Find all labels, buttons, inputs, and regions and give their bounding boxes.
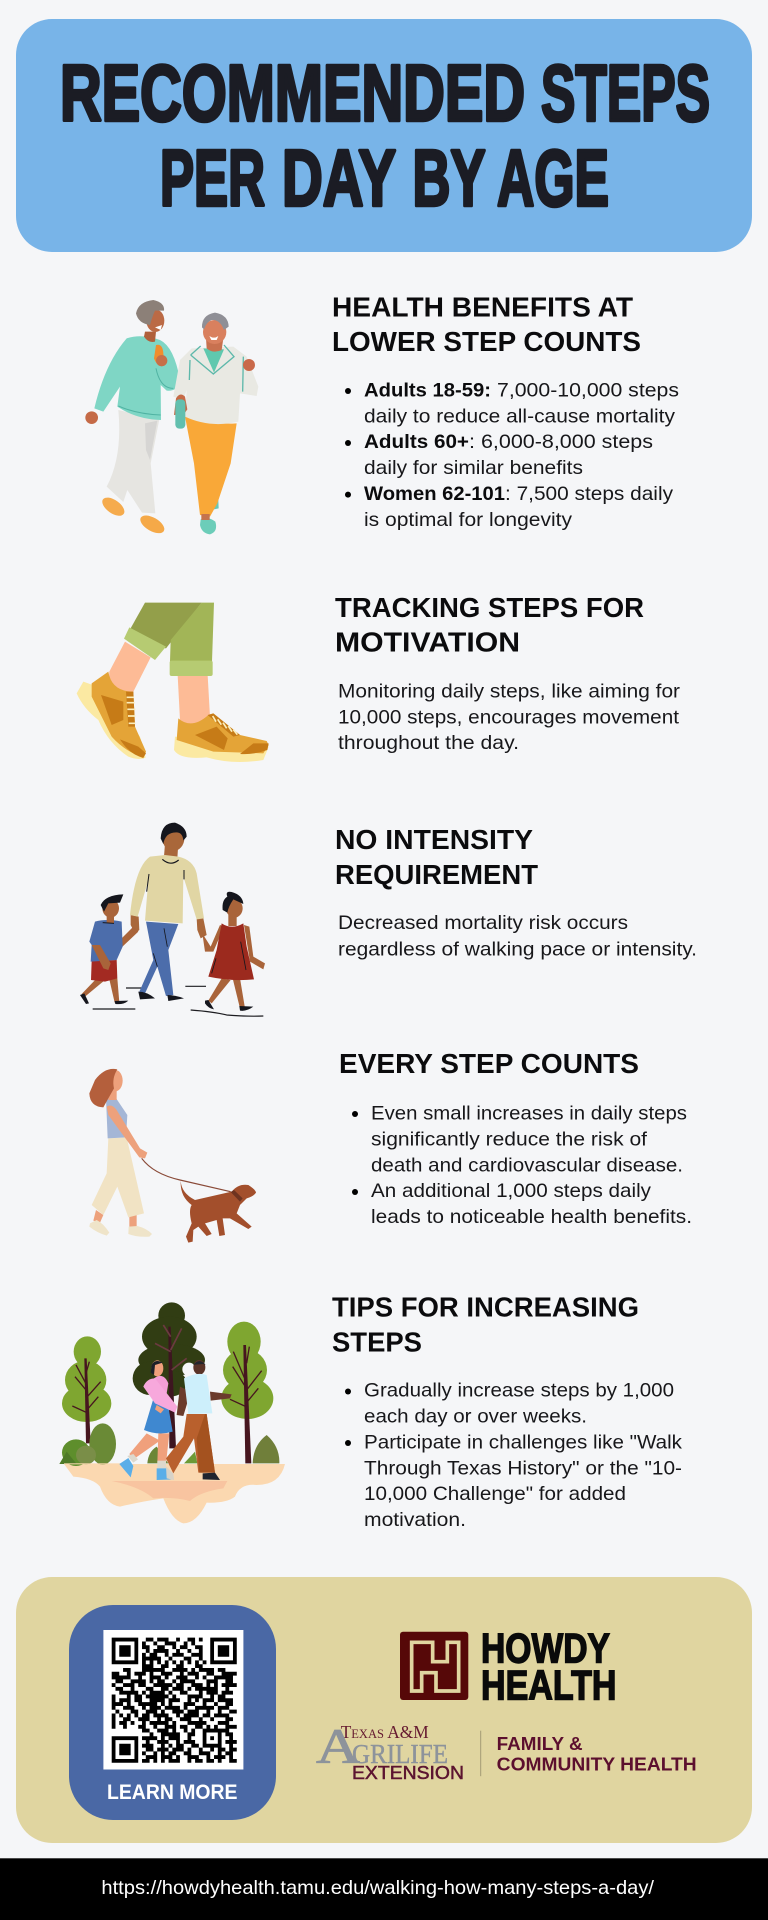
bullet list: daily for similar benefits (364, 457, 583, 479)
bullet list: 10,000 Challenge" for added (364, 1483, 626, 1505)
bullet list: leads to noticeable health benefits. (371, 1206, 692, 1228)
body text: 10,000 steps, encourages movement (338, 706, 680, 728)
heading: REQUIREMENT (335, 859, 538, 890)
bullet list: : 7,500 steps daily (505, 483, 673, 505)
bullet list: significantly reduce the risk of (371, 1128, 648, 1150)
Texas A&M AgriLife Extension logo: COMMUNITY HEALTH (497, 1755, 697, 1775)
bullet list: Adults 60+ (364, 431, 469, 453)
body text: Decreased mortality risk occurs (338, 912, 628, 934)
bullet list (345, 380, 679, 531)
bullet list: is optimal for longevity (364, 509, 572, 531)
heading (332, 1292, 639, 1358)
bullet list: motivation. (364, 1509, 466, 1531)
illustration: couple walking among trees (59, 1302, 285, 1523)
QR card (69, 1605, 276, 1820)
heading: TRACKING STEPS FOR (335, 592, 644, 623)
bullet list (345, 1380, 682, 1531)
title line 2: BY (412, 134, 486, 222)
learn more label: LEARN MORE (107, 1781, 238, 1804)
bullet list: daily to reduce all-cause mortality (364, 406, 675, 428)
Texas A&M AgriLife Extension logo: A (316, 1718, 360, 1774)
footer panel: learn more and logos (16, 1577, 752, 1843)
bullet list: Adults 18-59: (364, 380, 491, 402)
bullet list (352, 1102, 692, 1228)
illustration: older couple walking (85, 300, 258, 537)
bullet list: Gradually increase steps by 1,000 (364, 1380, 674, 1402)
heading: EVERY STEP COUNTS (339, 1048, 639, 1079)
body text: throughout the day. (338, 732, 519, 754)
illustration: adult walking with two children (80, 823, 265, 1016)
Texas A&M AgriLife Extension logo: EXTENSION (352, 1763, 464, 1783)
title line 2 (160, 134, 609, 222)
bullet list: Participate in challenges like "Walk (364, 1431, 682, 1453)
title line 2: PER (160, 134, 265, 222)
title line 1: RECOMMENDED (60, 48, 525, 138)
footer bar with URL (0, 1858, 768, 1920)
heading (335, 824, 538, 890)
panel: tracking steps (77, 592, 681, 762)
panel: every step counts (89, 1048, 692, 1243)
title line 2: AGE (497, 134, 609, 222)
heading: NO INTENSITY (335, 824, 533, 855)
heading: HEALTH BENEFITS AT (332, 292, 633, 322)
bullet list: Women 62-101 (364, 483, 505, 505)
panel: health benefits (85, 292, 679, 537)
Texas A&M AgriLife Extension logo: FAMILY & (497, 1734, 583, 1754)
bullet list: 7,000-10,000 steps (497, 380, 679, 402)
Howdy Health logo: HEALTH (481, 1661, 616, 1708)
body text: Monitoring daily steps, like aiming for (338, 680, 681, 702)
Howdy Health logo: HOWDY (481, 1624, 610, 1671)
Texas A&M AgriLife Extension logo: GRILIFE (352, 1739, 448, 1769)
Texas A&M AgriLife Extension logo (316, 1718, 697, 1783)
bullet list: Through Texas History" or the "10- (364, 1457, 682, 1479)
title line 2: DAY (282, 134, 396, 222)
footer bar with URL: https://howdyhealth.tamu.edu/walking-how-many-steps-a-day/ (101, 1877, 655, 1899)
QR code (112, 1640, 237, 1761)
body text (338, 680, 681, 754)
body text (338, 912, 697, 961)
bullet list: Even small increases in daily steps (371, 1102, 687, 1124)
bullet list: : 6,000-8,000 steps (469, 431, 653, 453)
bullet list: each day or over weeks. (364, 1406, 587, 1428)
illustration: walking legs and sneakers (77, 603, 269, 762)
panel: tips for increasing steps (59, 1292, 682, 1531)
Howdy Health logo (400, 1624, 616, 1708)
illustration: woman walking a dog (89, 1069, 256, 1243)
heading (335, 592, 644, 658)
panel: no intensity requirement (80, 823, 697, 1016)
heading: STEPS (332, 1327, 422, 1358)
heading: LOWER STEP COUNTS (332, 326, 641, 357)
title banner (16, 19, 752, 252)
Texas A&M AgriLife Extension logo: Texas A&M (341, 1722, 429, 1742)
heading (332, 292, 641, 357)
body text: regardless of walking pace or intensity. (338, 939, 697, 961)
bullet list: An additional 1,000 steps daily (371, 1180, 651, 1202)
heading: MOTIVATION (335, 626, 520, 658)
bullet list: death and cardiovascular disease. (371, 1154, 683, 1176)
heading: TIPS FOR INCREASING (332, 1292, 639, 1323)
